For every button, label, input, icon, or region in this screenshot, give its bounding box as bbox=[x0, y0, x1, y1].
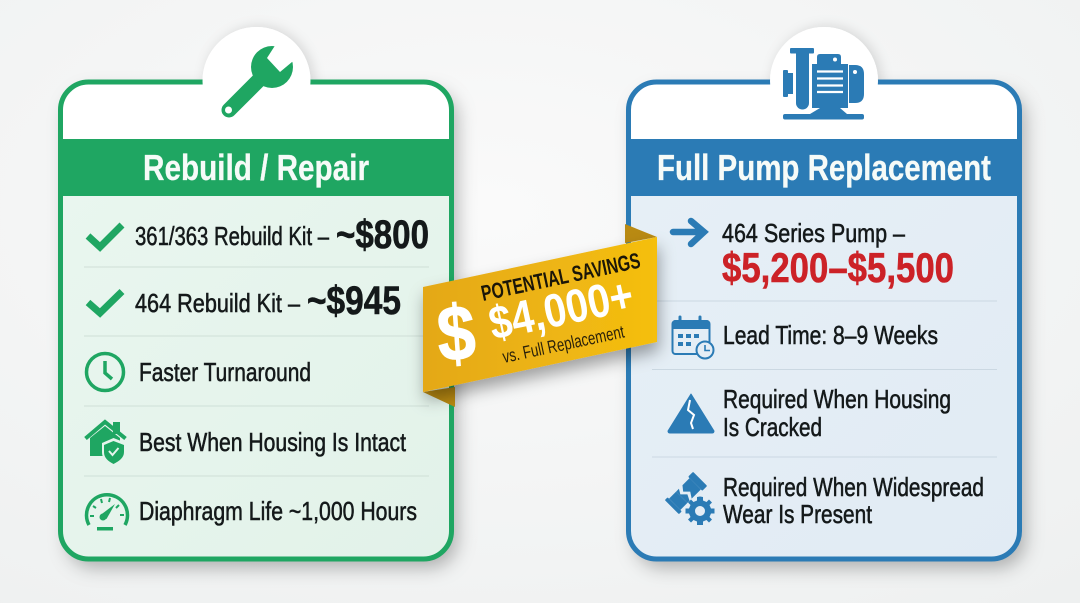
item: 464 rebuild kit bbox=[135, 279, 401, 323]
item: required when widespread wear: Wear Is Present bbox=[723, 499, 873, 529]
label: potential savings: POTENTIAL SAVINGS bbox=[479, 248, 642, 306]
item: required when housing is cracked: Is Cracked bbox=[723, 412, 822, 442]
label: vs. full replacement: vs. Full Replacement bbox=[501, 322, 626, 367]
item: 464 series pump price: $5,200–$5,500 bbox=[722, 244, 954, 291]
item: 464 series pump price: 464 Series Pump – bbox=[722, 218, 905, 248]
item: 464 rebuild kit: ~$945 bbox=[307, 279, 401, 323]
panel: rebuild / repair bbox=[58, 27, 454, 561]
item: required when housing is cracked bbox=[723, 384, 951, 442]
item: diaphragm life: Diaphragm Life ~1,000 Hours bbox=[139, 496, 417, 526]
item: 361/363 rebuild kit: ~$800 bbox=[336, 213, 429, 257]
heading: rebuild / repair: Rebuild / Repair bbox=[143, 147, 369, 188]
item: best when housing is intact: Best When Housing Is Intact bbox=[139, 427, 407, 457]
item: required when widespread wear bbox=[723, 472, 984, 529]
icon: check mark 1 bbox=[88, 225, 122, 247]
icon: pump bbox=[783, 48, 864, 120]
callout ribbon: potential savings bbox=[423, 224, 657, 407]
icon: arrow bbox=[673, 221, 704, 244]
icon: clock bbox=[86, 354, 124, 390]
item: required when housing is cracked: Required When Housing bbox=[723, 384, 951, 414]
panel: full pump replacement bbox=[626, 27, 1022, 561]
icon: broken bolt and gear bbox=[665, 472, 714, 525]
item: lead time: Lead Time: 8–9 Weeks bbox=[723, 320, 938, 350]
icon: check mark 2 bbox=[88, 292, 122, 313]
heading: full pump replacement: Full Pump Replacement bbox=[657, 147, 991, 188]
icon: cracked triangle bbox=[668, 394, 714, 433]
icon: calendar with clock bbox=[672, 317, 714, 358]
item: 361/363 rebuild kit bbox=[135, 213, 429, 257]
item: 464 rebuild kit: 464 Rebuild Kit – bbox=[135, 288, 300, 318]
item: faster turnaround: Faster Turnaround bbox=[139, 357, 311, 387]
dollar sign: $ bbox=[434, 288, 478, 378]
icon: house with shield bbox=[86, 422, 126, 466]
item: 361/363 rebuild kit: 361/363 Rebuild Kit – bbox=[135, 221, 329, 251]
item: required when widespread wear: Required When Widespread bbox=[723, 472, 984, 502]
icon: wrench bbox=[225, 44, 297, 114]
icon: speedometer bbox=[86, 495, 127, 530]
amount: $4,000+: $4,000+ bbox=[484, 268, 638, 350]
item: 464 series pump price bbox=[722, 218, 954, 291]
